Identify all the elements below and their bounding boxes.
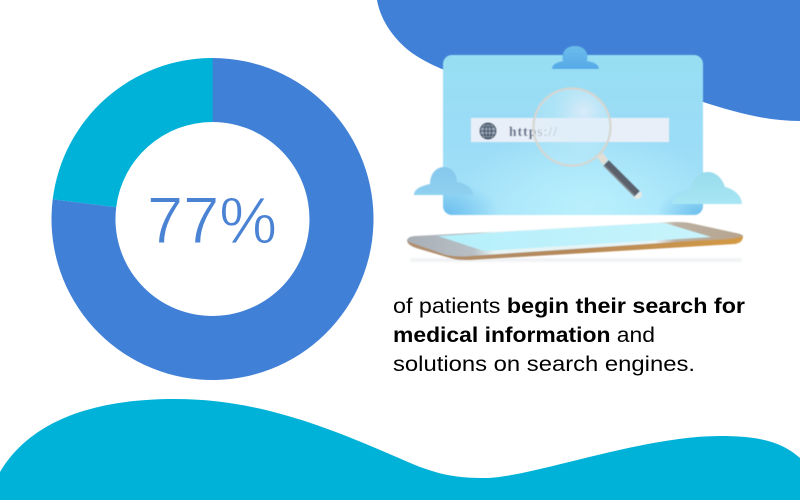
bottom cyan wave: [0, 399, 800, 500]
icon: top cloud: [552, 46, 599, 69]
icon: globe: [480, 123, 496, 139]
tablet edge: [407, 236, 743, 260]
caption line 3: solutions on search engines.: [393, 352, 695, 376]
caption line 1: of patients begin their search for: [393, 294, 746, 318]
icon: left cloud: [414, 167, 473, 195]
address bar: [471, 118, 669, 142]
handle: [606, 163, 637, 194]
tablet: [407, 222, 743, 260]
caption text: [393, 294, 746, 376]
tablet screen: [438, 223, 711, 251]
glass browser panel: [443, 55, 703, 215]
ferrule: [597, 153, 608, 165]
address bar text: https://: [509, 124, 557, 139]
caption line 2: medical information and: [393, 323, 655, 347]
tablet shadow: [410, 259, 742, 261]
icon: right cloud: [672, 172, 742, 204]
handle tip: [633, 191, 642, 199]
tablet bezel: [407, 222, 743, 256]
donut chart: [52, 58, 374, 380]
magnifying glass: [534, 88, 642, 199]
illustration: browser search on tablet: [407, 46, 743, 261]
top-right blue wave: [377, 0, 800, 121]
donut value: 77%: [147, 183, 277, 257]
lens: [534, 88, 610, 166]
donut segment: 23% remainder: [53, 58, 213, 207]
donut segment: 77%: [52, 58, 374, 380]
